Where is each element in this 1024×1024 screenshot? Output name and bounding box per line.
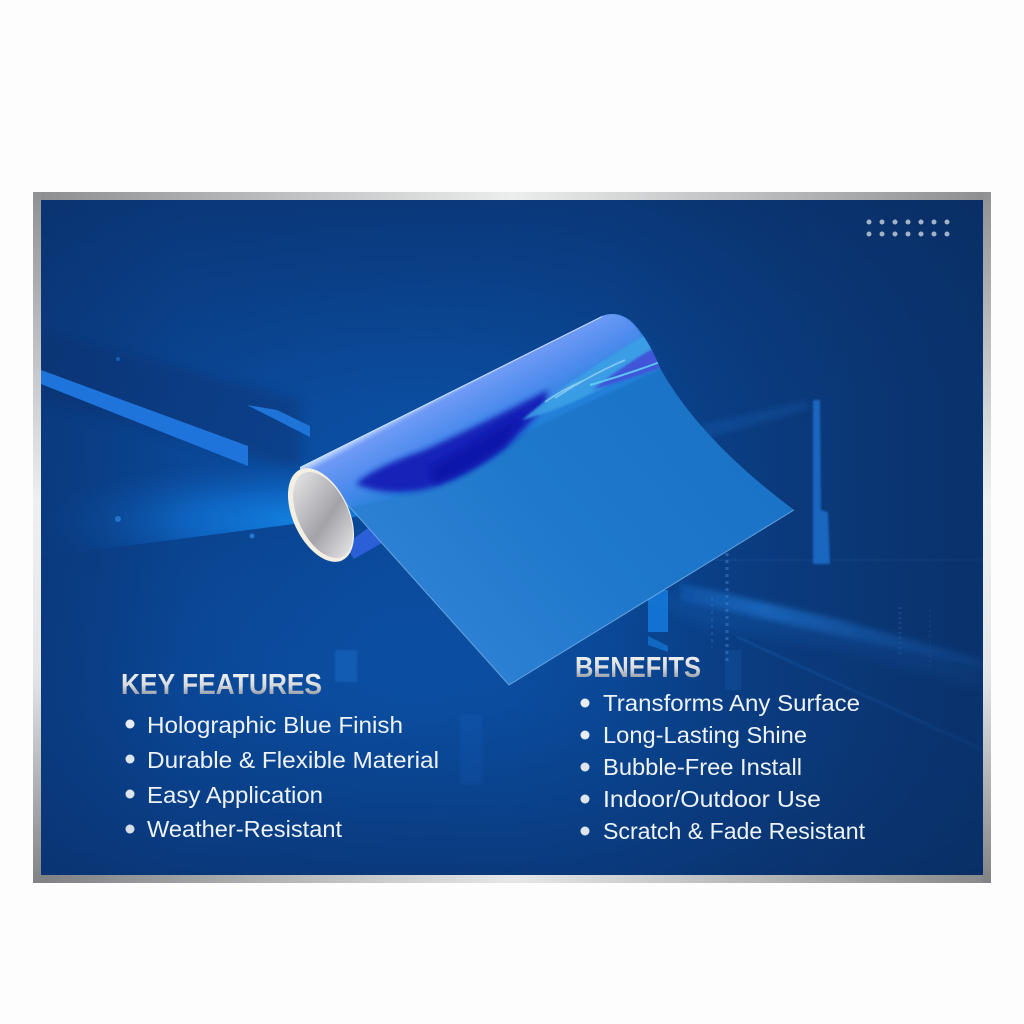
- list: benefits: Bubble-Free Install: [603, 754, 802, 780]
- list: features: Durable & Flexible Material: [147, 747, 439, 773]
- decorative dot grid: [866, 220, 950, 236]
- list: benefits: Indoor/Outdoor Use: [603, 786, 821, 812]
- sheet edge highlight: [346, 503, 794, 685]
- cardboard tube end: [274, 458, 368, 572]
- roll underside: [345, 525, 382, 559]
- film sheet and roll body: [300, 314, 794, 685]
- list: benefits: Scratch & Fade Resistant: [603, 818, 866, 844]
- panel: key features: [121, 669, 439, 842]
- product: holographic vinyl roll: [288, 314, 794, 686]
- list: features: Easy Application: [147, 782, 323, 808]
- panel: blue tech background: [41, 200, 983, 875]
- list: features: Weather-Resistant: [147, 816, 343, 842]
- panel: benefits: [575, 652, 866, 844]
- list: features: Holographic Blue Finish: [147, 712, 403, 738]
- heading: benefits: BENEFITS: [575, 652, 701, 684]
- list: features: [126, 712, 439, 842]
- list: benefits: Transforms Any Surface: [603, 690, 860, 716]
- infographic canvas: [33, 192, 991, 883]
- heading: key features: KEY FEATURES: [121, 669, 322, 701]
- list: benefits: Long-Lasting Shine: [603, 722, 807, 748]
- list: benefits: [580, 690, 866, 844]
- metallic frame: [33, 192, 991, 883]
